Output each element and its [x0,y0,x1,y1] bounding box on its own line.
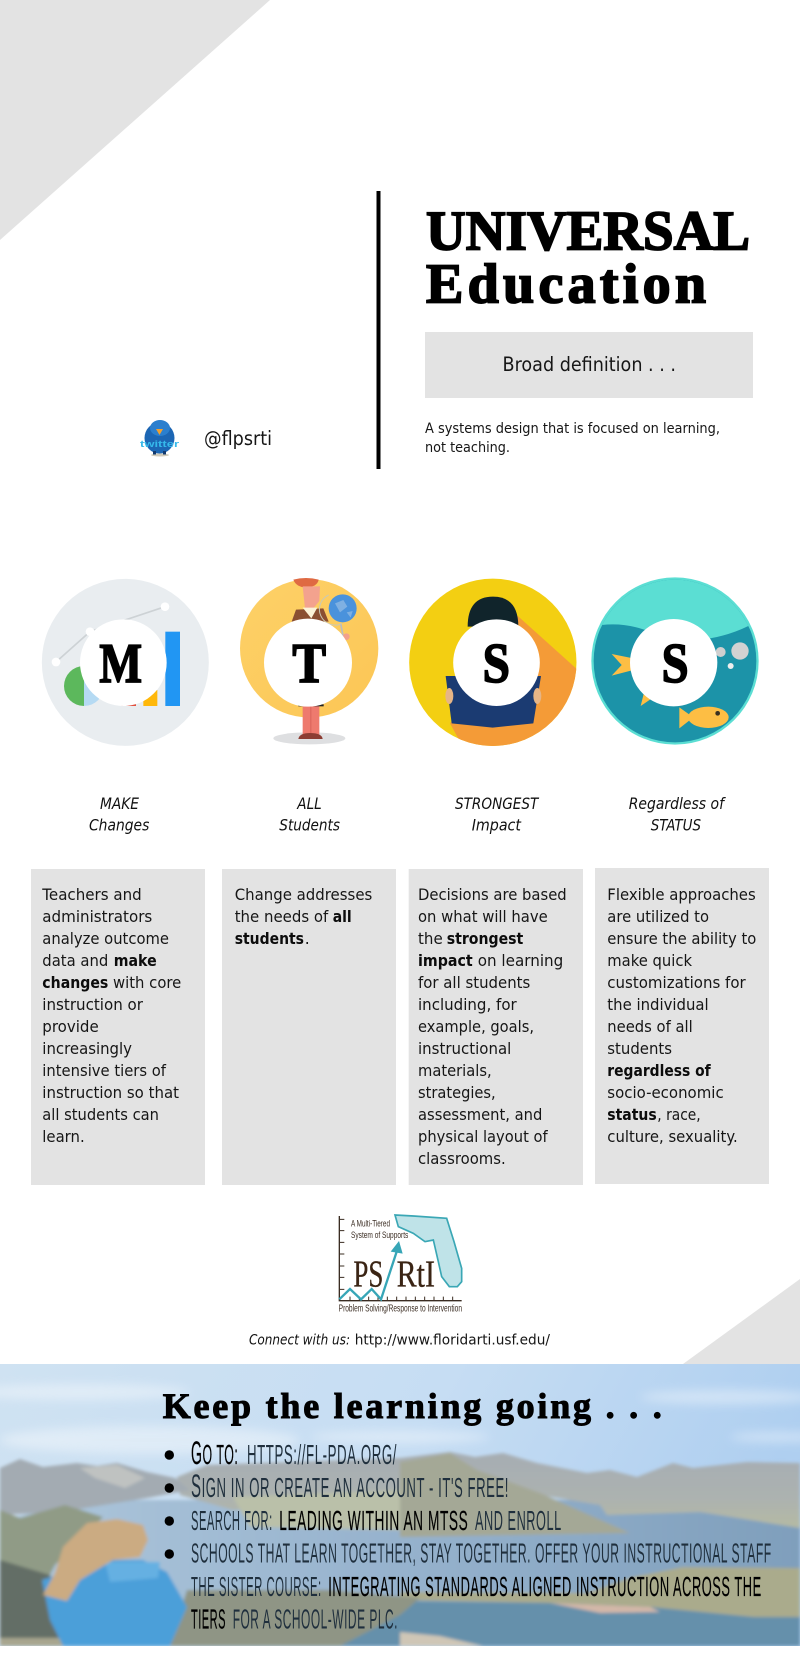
caption: all students [279,794,340,834]
panel: strongest impact: on what will have [418,908,548,926]
decorative triangle: top left [0,0,270,240]
near hill [400,1453,630,1537]
panel: strongest impact: physical layout of [418,1128,548,1146]
heading: keep the learning going: Keep the learning going . . . [163,1386,662,1426]
panel: regardless of status: , race, [657,1106,701,1124]
icon circle: T teacher with globe: T [292,633,326,695]
woman hoodie [42,1560,187,1646]
panel: make changes [31,869,205,1185]
icon circle: M chart: M [99,633,142,695]
bullet list: THE SISTER COURSE: [191,1571,322,1602]
logo: PS/RtI: PS [353,1254,383,1296]
bullet list: TIERS [191,1604,226,1635]
green shore [233,1490,400,1530]
panel: make changes: increasingly [42,1040,132,1058]
logo: PS/RtI: A Multi-Tiered [351,1219,390,1229]
panel: strongest impact: classrooms. [418,1150,506,1168]
photo band: mountain lake with woman [0,1364,800,1646]
panel: make changes: with core [113,974,181,992]
icon circle: M chart [42,579,209,746]
title [426,200,750,316]
panel: strongest impact: impact [418,952,473,970]
caption: all students: ALL [296,794,322,813]
caption: regardless of status: STATUS [651,816,701,834]
icon circle: T teacher with globe [240,578,378,744]
caption: make changes: MAKE [100,794,140,813]
bullet list: GO TO: [191,1435,238,1471]
panel: make changes: Teachers and [41,886,142,904]
title: Education [426,254,706,316]
panel: strongest impact: including, for [418,996,517,1014]
logo: PS/RtI [339,1215,462,1315]
panel: all students: all [333,908,352,926]
bullet list: SEARCH FOR: [191,1505,273,1536]
panel: make changes: make [114,952,157,970]
panel: regardless of status: status [607,1106,657,1124]
panel: regardless of status: are utilized to [607,908,709,926]
definition text: not teaching. [425,440,510,456]
panel: strongest impact: instructional [418,1040,511,1058]
panel: strongest impact: materials, [418,1062,492,1080]
bullet list [165,1435,772,1635]
panel: strongest impact [409,869,583,1185]
panel: all students [222,869,396,1185]
panel: regardless of status: socio-economic [607,1084,724,1102]
definition text [425,421,720,456]
woman hair [43,1519,148,1601]
icon circle: S person reading: S [483,633,510,695]
peninsula [400,1567,800,1617]
panel: make changes: learn. [42,1128,85,1146]
panel: strongest impact: on learning [478,952,563,970]
panel: make changes: changes [42,974,108,992]
land right of woman [170,1590,420,1646]
bullet list: FOR A SCHOOL-WIDE PLC. [233,1604,398,1635]
icon circle: S fish in water: S [662,633,689,695]
panel: regardless of status: culture, sexuality. [607,1128,738,1146]
panel: make changes: analyze outcome [42,930,169,948]
definition label box [425,332,753,398]
panel: all students: . [305,930,310,948]
panel: make changes: instruction so that [42,1084,179,1102]
logo: PS/RtI: Problem Solving/Response to Intervention [339,1304,462,1315]
panel: strongest impact: strongest [447,930,524,948]
panel: strongest impact: example, goals, [418,1018,534,1036]
icon: twitter bird: twitter [140,439,180,449]
caption: strongest impact: Impact [472,816,522,834]
panel: regardless of status: needs of all [607,1018,693,1036]
panel: make changes: intensive tiers of [42,1062,166,1080]
panel: regardless of status: make quick [607,952,692,970]
panel: regardless of status: the individual [607,996,709,1014]
panel: make changes: data and [42,952,108,970]
vertical divider bar [376,191,380,469]
caption: make changes [89,794,149,834]
definition text: A systems design that is focused on learning, [425,421,720,437]
caption: regardless of status: Regardless of [629,794,726,813]
decorative triangle: bottom right [683,1279,800,1364]
panel: strongest impact: the [418,930,443,948]
connect text: Connect with us: [249,1332,350,1348]
panel: all students: Change addresses [235,886,372,904]
panel: make changes: instruction or [42,996,144,1014]
logo: PS/RtI: RtI [397,1254,435,1296]
panel: strongest impact: Decisions are based [418,886,567,904]
lower water [300,1600,800,1646]
icon: twitter bird [140,420,180,456]
far ridge, centre and right [177,1452,800,1528]
caption: regardless of status [629,794,726,834]
connect text [249,1332,550,1348]
bullet list: AND ENROLL [475,1505,562,1536]
panel: all students: the needs of [235,908,329,926]
panel: make changes: administrators [42,908,152,926]
panel: regardless of status: Flexible approaches [607,886,756,904]
caption: all students: Students [279,816,340,834]
panel: make changes: provide [42,1018,99,1036]
bullet list: LEADING WITHIN AN MTSS [279,1505,468,1536]
twitter handle: @flpsrti [204,427,272,450]
connect text: http://www.floridarti.usf.edu/ [355,1332,550,1348]
title: UNIVERSAL [426,200,750,262]
upper water [18,1498,800,1602]
caption: make changes: Changes [89,816,149,834]
panel: all students: students [235,930,304,948]
icon circle: S fish in water [587,573,767,745]
far ridge, left [0,1459,190,1515]
panel: make changes: all students can [42,1106,159,1124]
icon circle: S person reading [409,578,576,746]
caption: strongest impact: STRONGEST [455,794,539,813]
panel: regardless of status: students [607,1040,672,1058]
caption: strongest impact [455,794,539,834]
panel: regardless of status: customizations for [607,974,746,992]
left mountain [0,1504,104,1576]
logo: PS/RtI: System of Supports [351,1230,409,1240]
panel: regardless of status [595,868,769,1184]
panel: strongest impact: assessment, and [418,1106,542,1124]
panel: regardless of status: regardless of [607,1062,711,1080]
definition label box: Broad definition . . . [502,353,676,376]
panel: strongest impact: for all students [418,974,530,992]
bullet list: HTTPS://FL-PDA.ORG/ [247,1439,397,1470]
panel: strongest impact: strategies, [418,1084,496,1102]
panel: regardless of status: ensure the ability to [607,930,756,948]
